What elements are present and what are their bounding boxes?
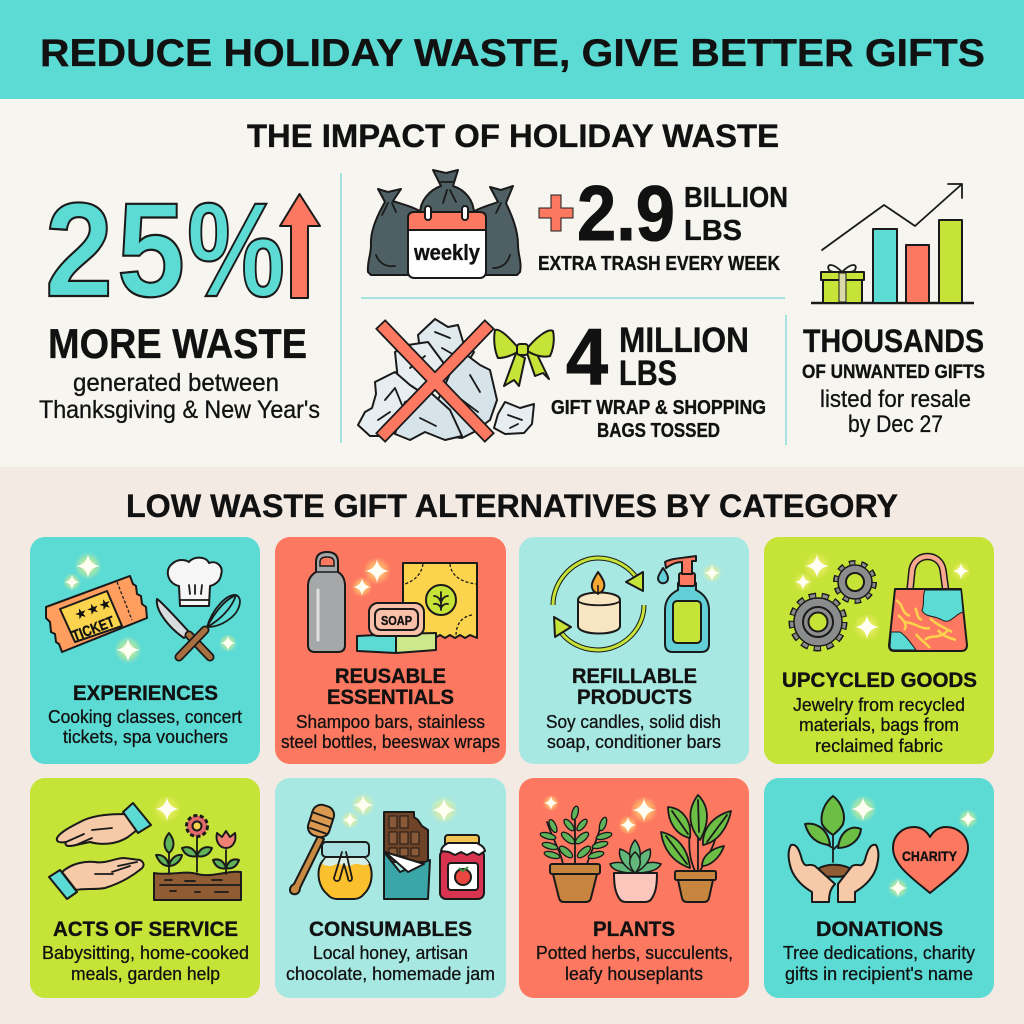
- heading: alternatives: LOW WASTE GIFT ALTERNATIVES BY CATEGORY: [126, 488, 898, 524]
- icon: chocolate bar: [384, 812, 430, 899]
- stat: 2.9 billion lbs: [538, 169, 788, 275]
- heading: impact: THE IMPACT OF HOLIDAY WASTE: [247, 118, 779, 154]
- icon: up arrow: [280, 194, 320, 298]
- icon: jam jar: [440, 835, 485, 899]
- axis: [811, 302, 974, 304]
- icon: pump bottle: [665, 556, 709, 652]
- card description: reclaimed fabric: [815, 735, 943, 756]
- icon: charity heart: [893, 827, 968, 893]
- description: generated between: [39, 369, 320, 424]
- sparkles: [793, 552, 971, 641]
- panel: reusable essentials: [275, 537, 506, 764]
- card description: gifts in recipient's name: [785, 963, 973, 984]
- unit: million lbs: [619, 321, 749, 393]
- card title: PRODUCTS: [577, 686, 692, 709]
- card description: Local honey, artisan: [313, 942, 468, 963]
- panel: acts of service: [30, 778, 260, 998]
- card title: ESSENTIALS: [327, 686, 454, 709]
- middle trash bag: [420, 170, 474, 214]
- card description: meals, garden help: [71, 963, 220, 984]
- description: listed for resale: by Dec 27: [848, 411, 943, 438]
- bar coral: [906, 245, 929, 303]
- icon: green bow: [494, 330, 554, 386]
- background: alternatives section: [0, 467, 1024, 1024]
- stat: 25 percent more waste: [39, 176, 320, 424]
- description: listed for resale: [820, 386, 971, 438]
- label: more waste: MORE WASTE: [48, 320, 307, 367]
- big number 25%: 2: [45, 176, 113, 325]
- description: gift wrap: [551, 397, 766, 442]
- big number 25%: %: [187, 176, 285, 325]
- stat: 4 million lbs: [551, 312, 766, 442]
- card description: Shampoo bars, stainless: [296, 711, 485, 732]
- icon: large gear: [793, 597, 843, 647]
- card description: [546, 711, 721, 752]
- card title: ACTS OF SERVICE: [53, 918, 238, 941]
- card description: [783, 942, 976, 984]
- card description: [793, 694, 965, 756]
- sparkles: [63, 552, 237, 664]
- icon: chef hat: [168, 558, 222, 606]
- background: impact section: [0, 0, 1024, 467]
- unit: million lbs: MILLION: [619, 321, 749, 360]
- card description: steel bottles, beeswax wraps: [281, 731, 500, 752]
- icon: patchwork tote bag: [889, 556, 967, 651]
- icon: leafy houseplant: [661, 795, 731, 902]
- card description: chocolate, homemade jam: [286, 963, 495, 984]
- panel: refillable products: [519, 537, 749, 764]
- card title: UPCYCLED GOODS: [782, 669, 977, 692]
- icon: droplet: [658, 568, 668, 583]
- icon: garden bed: [154, 816, 241, 900]
- icon: gift and rising bar chart: [811, 184, 974, 303]
- icon: plus sign: [539, 195, 573, 231]
- header banner: [0, 0, 1024, 99]
- icon: potted herbs: [539, 805, 613, 902]
- label: of unwanted gifts: OF UNWANTED GIFTS: [802, 362, 985, 383]
- card title: REFILLABLE: [572, 665, 697, 688]
- red X: [385, 329, 485, 433]
- sparkle: [153, 795, 181, 823]
- icon: trash bags and weekly calendar: [368, 170, 521, 278]
- bar lime: [939, 220, 962, 303]
- icon: lower hand: [49, 858, 144, 899]
- icon: knife: [157, 599, 210, 657]
- description: extra trash: EXTRA TRASH EVERY WEEK: [538, 253, 780, 275]
- icon: soap bars: SOAP: [381, 613, 412, 628]
- icon: steel bottle: [308, 552, 345, 652]
- label: thousands: THOUSANDS: [803, 323, 984, 359]
- sparkles: [352, 557, 391, 598]
- card description: Potted herbs, succulents,: [536, 942, 733, 963]
- icon: ticket: ★ ★ ★: [74, 598, 112, 622]
- card description: [286, 942, 495, 984]
- card description: Cooking classes, concert: [48, 706, 242, 727]
- title: REDUCE HOLIDAY WASTE, GIVE BETTER GIFTS: [40, 32, 985, 75]
- number 4: 4: [566, 312, 608, 401]
- right trash bag: [470, 186, 521, 275]
- sparkles: [543, 795, 658, 835]
- left trash bag: [368, 189, 424, 275]
- card description: materials, bags from: [799, 714, 959, 735]
- card description: Babysitting, home-cooked: [42, 942, 249, 963]
- icon: crumpled gift wrap with red X: [358, 319, 534, 440]
- card description: [536, 942, 733, 984]
- gift box: [821, 265, 864, 303]
- bar teal: [873, 229, 897, 303]
- sparkles: [849, 795, 978, 898]
- card title: [327, 665, 454, 709]
- card description: [48, 706, 242, 747]
- sparkle: [702, 563, 722, 583]
- icon: small gear: [837, 564, 873, 600]
- heart label: CHARITY: [902, 849, 957, 864]
- icon: refill arrows: [553, 558, 644, 650]
- description: gift wrap: BAGS TOSSED: [597, 420, 720, 442]
- card title: PLANTS: [593, 918, 675, 941]
- card title: DONATIONS: [816, 918, 943, 941]
- panel: consumables: [275, 778, 506, 998]
- card description: Soy candles, solid dish: [546, 711, 721, 732]
- icon: upper hand: [57, 803, 151, 846]
- card description: tickets, spa vouchers: [63, 726, 228, 747]
- panel: plants: [519, 778, 749, 998]
- icon: candle: [578, 572, 620, 634]
- big number 25%: 5: [117, 176, 185, 325]
- icon: ticket: [46, 576, 147, 652]
- unit: billion lbs: [684, 182, 788, 247]
- icon: soap bars: [357, 603, 436, 653]
- panel: donations: [764, 778, 994, 998]
- stat: thousands of unwanted gifts: [802, 323, 985, 438]
- card title: CONSUMABLES: [309, 918, 472, 941]
- icon: honey jar: [318, 842, 372, 899]
- number 2.9: 2.9: [577, 169, 675, 257]
- calendar: [408, 212, 486, 278]
- card description: [42, 942, 249, 984]
- calendar label: weekly: [413, 240, 481, 265]
- sparkles: [341, 793, 458, 829]
- paper pile: [358, 319, 534, 440]
- description: gift wrap: GIFT WRAP & SHOPPING: [551, 397, 766, 419]
- card title: REUSABLE: [335, 665, 446, 688]
- icon: honey dipper: [290, 802, 336, 894]
- icon: whisk: [179, 595, 240, 657]
- card description: soap, conditioner bars: [547, 731, 721, 752]
- card description: leafy houseplants: [565, 963, 703, 984]
- icon: beeswax wrap: [403, 563, 477, 638]
- unit: billion lbs: BILLION: [684, 182, 788, 214]
- unit: billion lbs: LBS: [684, 215, 742, 247]
- card title: [572, 665, 697, 709]
- description: generated between: generated between: [73, 369, 279, 397]
- card title: EXPERIENCES: [73, 682, 218, 705]
- icon: seedling: [805, 796, 861, 877]
- icon: cupped hands: [789, 845, 878, 902]
- card description: [281, 711, 500, 752]
- icon: succulent: [610, 840, 661, 902]
- panel: upcycled goods: [764, 537, 994, 764]
- card description: Jewelry from recycled: [793, 694, 965, 715]
- panel: experiences: [30, 537, 260, 764]
- description: listed for resale: listed for resale: [820, 386, 971, 413]
- card description: Tree dedications, charity: [783, 942, 976, 963]
- unit: million lbs: LBS: [619, 354, 677, 393]
- trend arrow: [822, 184, 962, 250]
- description: generated between: Thanksgiving & New Year's: [39, 396, 320, 424]
- icon: ticket: TICKET: [70, 613, 117, 645]
